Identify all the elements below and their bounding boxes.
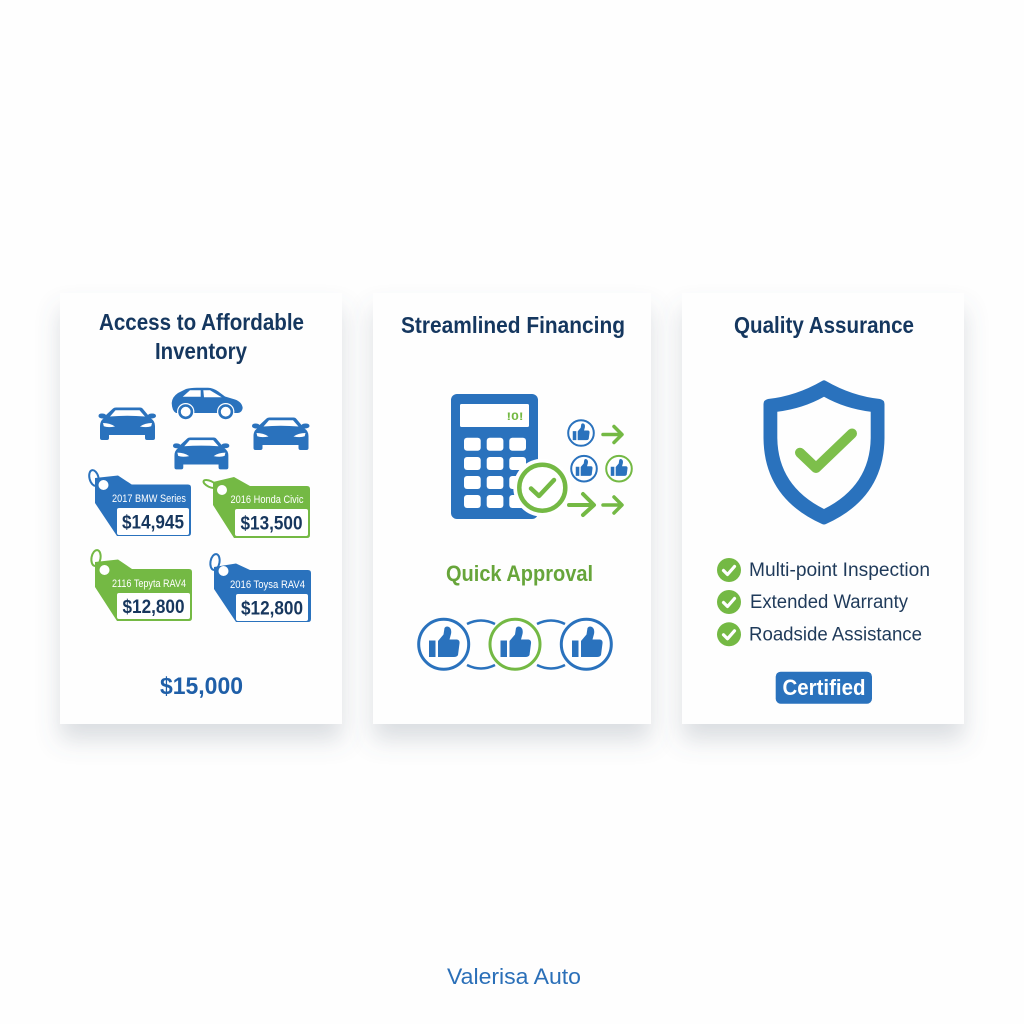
heading: access to affordable inventory: Access to Affordable bbox=[99, 309, 304, 335]
icon: calculator bbox=[451, 394, 538, 519]
footer brand: Valerisa Auto: Valerisa Auto bbox=[447, 964, 581, 989]
price tag: 2016 Toyota RAV4 green: 2116 Tepyta RAV4 bbox=[112, 578, 186, 590]
list item: extended warranty: Extended Warranty bbox=[750, 592, 908, 613]
price tag: 2016 Honda Civic: 2016 Honda Civic bbox=[230, 494, 304, 506]
icon: car front left bbox=[98, 408, 156, 440]
arrow: large lower bbox=[569, 494, 594, 515]
price tag: 2016 Honda Civic bbox=[202, 477, 310, 538]
heading: quality assurance: Quality Assurance bbox=[734, 312, 914, 338]
panel: streamlined financing bbox=[373, 293, 651, 724]
price tag: 2017 BMW Series: $14,945 bbox=[122, 512, 184, 534]
card 3 background bbox=[682, 293, 964, 724]
price tag: 2016 Honda Civic: $13,500 bbox=[240, 512, 303, 534]
icon: shield with check bbox=[764, 380, 884, 524]
icon: small thumb green ring bbox=[606, 456, 632, 482]
card 2 background bbox=[373, 293, 651, 724]
heading: access to affordable inventory: Inventory bbox=[155, 338, 247, 364]
icon: car front centre bbox=[173, 437, 229, 469]
arrow: top bbox=[603, 426, 622, 442]
price tag: 2016 Toyota RAV4 blue bbox=[209, 553, 311, 622]
panel: access to affordable inventory bbox=[60, 293, 342, 724]
icon: small thumb blue middle bbox=[571, 456, 597, 482]
heading: streamlined financing: Streamlined Financing bbox=[401, 312, 625, 338]
icon: car side bbox=[172, 388, 243, 420]
heading: quick approval: Quick Approval bbox=[446, 561, 593, 586]
badge: certified: Certified bbox=[782, 675, 866, 700]
list item: roadside assistance: Roadside Assistance bbox=[749, 624, 922, 646]
price tag: 2016 Toyota RAV4 blue: $12,800 bbox=[241, 598, 303, 620]
price: $15,000: $15,000 bbox=[160, 673, 243, 700]
list item: multi-point inspection: Multi-point Inspection bbox=[749, 560, 930, 581]
price tag: 2016 Toyota RAV4 blue: 2016 Toysa RAV4 bbox=[230, 579, 305, 591]
chain of approval thumbs bbox=[419, 619, 611, 669]
icon: car front right bbox=[252, 418, 310, 450]
price tag: 2016 Toyota RAV4 green bbox=[90, 549, 192, 621]
price tag: 2017 BMW Series: 2017 BMW Series bbox=[112, 493, 186, 505]
arrow: small lower bbox=[603, 497, 622, 513]
price tag: 2017 BMW Series bbox=[88, 469, 191, 536]
card 1 background bbox=[60, 293, 342, 724]
icon: small thumb blue top bbox=[568, 420, 594, 446]
icon: approval check badge bbox=[513, 459, 571, 517]
icon: calculator: !0! bbox=[506, 411, 524, 423]
panel: quality assurance bbox=[682, 293, 964, 724]
price tag: 2016 Toyota RAV4 green: $12,800 bbox=[122, 596, 185, 618]
